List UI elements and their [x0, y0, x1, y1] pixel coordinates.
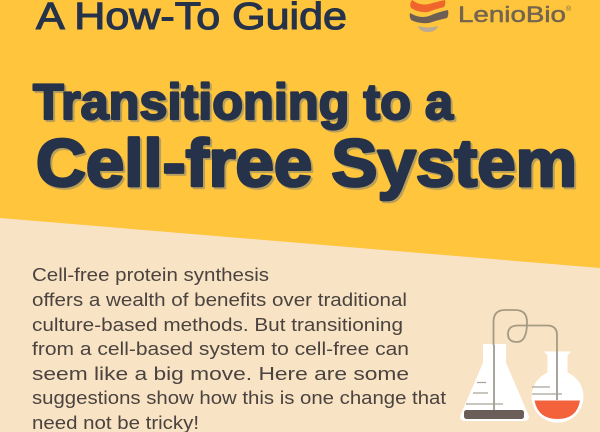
title line 1: Transitioning to a [33, 74, 454, 130]
icon: logo waves [410, 0, 448, 32]
red liquid [534, 400, 580, 419]
conical flask [461, 345, 528, 420]
icon: connected flasks [461, 310, 583, 422]
cream diagonal panel [0, 218, 600, 432]
title [33, 74, 577, 201]
flask sediment [464, 410, 524, 419]
intro text block: offers a wealth of benefits over traditional [32, 289, 407, 310]
logo wordmark: LenioBio [458, 2, 566, 27]
intro text block: seem like a big move. Here are some [32, 363, 409, 384]
intro text block: Cell-free protein synthesis [32, 264, 269, 285]
round flask [532, 352, 583, 422]
intro text block: suggestions show how this is one change that [32, 387, 446, 408]
connecting tube [494, 310, 557, 352]
registered mark: ® [566, 5, 572, 13]
scale marks [466, 382, 562, 404]
logo: LenioBio [410, 0, 572, 32]
intro text block [32, 264, 446, 432]
intro text block: culture-based methods. But transitioning [32, 314, 403, 335]
title line 2: Cell-free System [36, 126, 577, 201]
intro text block: from a cell-based system to cell-free can [32, 338, 409, 359]
flask stems [494, 345, 557, 410]
